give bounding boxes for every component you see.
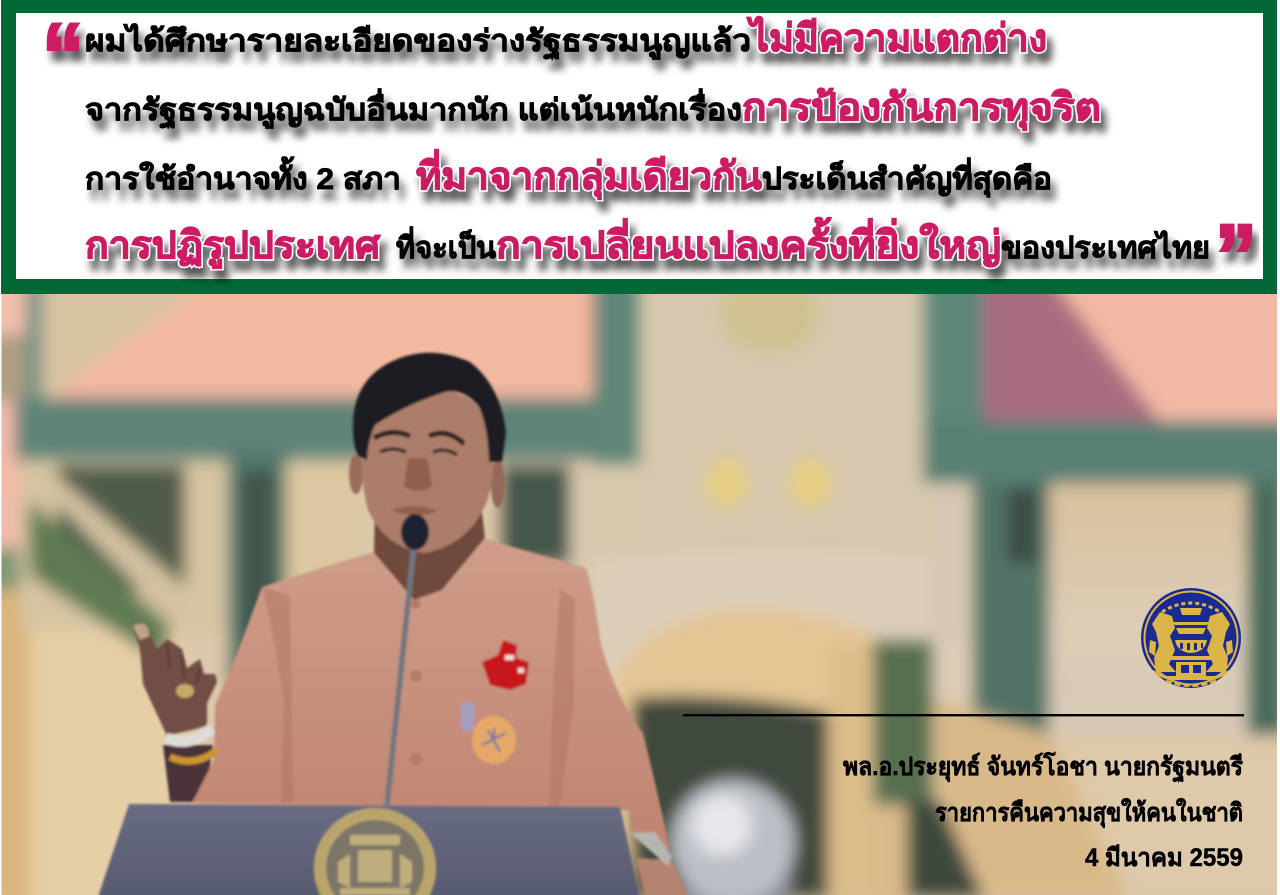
top dashes <box>1162 603 1220 612</box>
far left strip <box>2 294 31 339</box>
line 3 <box>85 149 1052 200</box>
door <box>632 696 828 895</box>
central bowl <box>1172 608 1210 653</box>
line 1 <box>85 16 1047 61</box>
line 3: ประเด็นสำคัญที่สุดคือ <box>762 157 1052 198</box>
jacket seams <box>262 587 575 806</box>
thumb highlight <box>133 624 150 640</box>
left lion <box>1149 612 1176 672</box>
left beam <box>15 398 640 460</box>
neck <box>374 495 485 600</box>
opening quote mark: “ <box>42 6 84 106</box>
microphone head <box>401 514 429 550</box>
line 4: ของประเทศไทย <box>1001 230 1210 265</box>
line 1: ไม่มีความแตกต่าง <box>746 16 1047 60</box>
ball <box>680 870 802 895</box>
byline text: พล.อ.ประยุทธ์ จันทร์โอชา นายกรัฐมนตรี <box>843 751 1244 783</box>
gold ring <box>176 684 194 698</box>
podium <box>98 804 640 895</box>
raised hand <box>133 624 217 736</box>
brows and eyes <box>374 432 464 444</box>
left window area <box>20 460 230 630</box>
jacket <box>192 538 670 850</box>
line 4: การปฏิรูปประเทศ <box>85 225 381 269</box>
line 4: การเปลี่ยนแปลงครั้งที่ยิ่งใหญ่ <box>496 217 1001 267</box>
right hand <box>636 858 688 895</box>
blurred photo background: building <box>0 275 1280 895</box>
line 2: การป้องกันการทุจริต <box>742 87 1101 131</box>
quote banner frame <box>1 0 1277 294</box>
quote banner panel <box>16 13 1263 279</box>
arch <box>590 548 968 700</box>
red flower <box>482 640 529 690</box>
podium seal <box>314 808 436 895</box>
line 1: ไม่มีความแตกต่าง <box>746 16 1047 60</box>
small pin <box>461 702 474 731</box>
wrist watch <box>630 832 672 866</box>
wristbands <box>166 728 212 741</box>
hair <box>353 353 506 462</box>
byline text <box>843 751 1244 872</box>
line 4: ที่จะเป็น <box>396 226 496 265</box>
line 3: การใช้อำนาจทั้ง 2 สภา <box>85 156 401 196</box>
nose and mouth <box>391 458 438 515</box>
pedestal <box>1170 656 1212 676</box>
line 4 <box>85 217 1210 269</box>
face <box>362 388 494 553</box>
byline text: 4 มีนาคม 2559 <box>1085 844 1243 872</box>
right lion <box>1206 612 1233 672</box>
orange badge <box>472 716 516 764</box>
quote text <box>42 6 1257 307</box>
right green post and beam <box>923 275 983 480</box>
center tower <box>640 275 925 645</box>
line 2: การป้องกันการทุจริต <box>742 87 1101 131</box>
line 3: ที่มาจากกลุ่มเดียวกัน <box>416 149 762 200</box>
photo subject: speaker at podium <box>98 353 688 895</box>
government seal logo <box>1141 588 1241 688</box>
forearm under sleeve <box>163 745 213 802</box>
byline rule <box>683 714 1244 716</box>
ground band <box>1153 670 1229 680</box>
line 4: การปฏิรูปประเทศ <box>85 225 381 269</box>
ears <box>349 454 363 494</box>
line 2: จากรัฐธรรมนูญฉบับอื่นมากนัก แต่เน้นหนักเรื่อง <box>85 88 742 130</box>
buttons <box>410 599 422 765</box>
line 1: ผมได้ศึกษารายละเอียดของร่างรัฐธรรมนูญแล้ว <box>85 23 751 61</box>
microphone stem <box>387 545 414 805</box>
left post and wall <box>26 275 42 405</box>
line 4: การเปลี่ยนแปลงครั้งที่ยิ่งใหญ่ <box>496 217 1001 267</box>
bottom dashes <box>1166 681 1216 686</box>
right panel <box>942 494 961 544</box>
finger lines <box>167 645 200 684</box>
line 3: ที่มาจากกลุ่มเดียวกัน <box>416 149 762 200</box>
byline text: รายการคืนความสุขให้คนในชาติ <box>935 797 1243 829</box>
line 2 <box>85 87 1101 131</box>
left roof <box>54 294 600 406</box>
closing quote mark: ” <box>1215 207 1257 307</box>
